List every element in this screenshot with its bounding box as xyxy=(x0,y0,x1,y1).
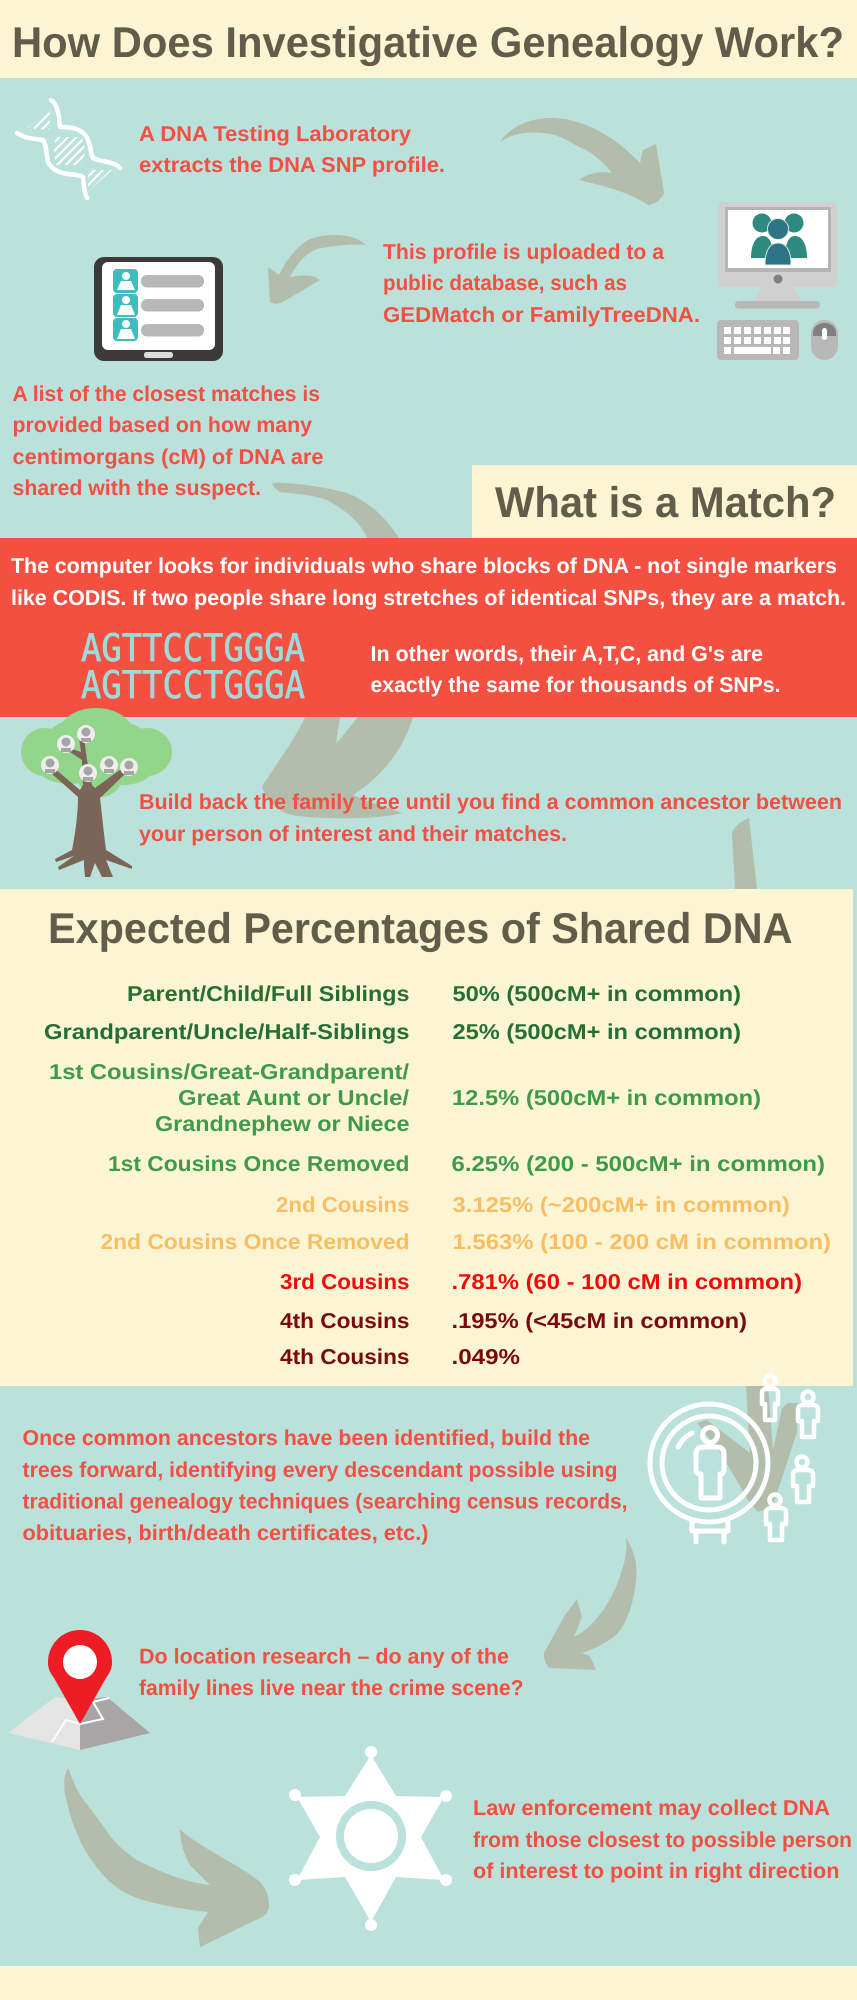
step 1 text: A DNA Testing Laboratory xyxy=(139,122,411,146)
match description text: like CODIS. If two people share long stretches of identical SNPs, they are a match. xyxy=(11,586,846,610)
what is a match heading box xyxy=(472,465,857,538)
panel: expected percentages xyxy=(0,889,853,1386)
row: third cousins: .781% (60 - 100 cM in common) xyxy=(452,1270,802,1294)
step 1 text: extracts the DNA SNP profile. xyxy=(139,153,445,177)
step 3 text xyxy=(12,382,324,500)
row: fourth cousins: .195% (<45cM in common) xyxy=(452,1309,747,1333)
step 1 text xyxy=(139,122,445,177)
match description text xyxy=(11,554,846,610)
row: second cousins: 3.125% (~200cM+ in common) xyxy=(452,1193,790,1217)
step 2 text: public database, such as xyxy=(383,271,627,295)
step 2 text xyxy=(383,240,700,327)
person 3 xyxy=(793,1456,813,1502)
row: grandparent: 25% (500cM+ in common) xyxy=(452,1020,741,1044)
icon: tablet with match list xyxy=(94,257,223,361)
person 4 xyxy=(766,1494,786,1540)
heading: What is a Match? xyxy=(495,479,836,527)
row: first cousins: 1st Cousins/Great-Grandparent/ xyxy=(49,1060,409,1084)
panel heading: Expected Percentages of Shared DNA xyxy=(48,905,792,953)
row: third cousins xyxy=(280,1270,802,1294)
row: second cousins once removed: 1.563% (100 - 200 cM in common) xyxy=(452,1230,831,1254)
person 2 xyxy=(798,1392,818,1437)
row: fourth cousins second: .049% xyxy=(452,1345,520,1369)
step 6 text: Do location research – do any of the xyxy=(139,1644,509,1668)
arrow: step 3 to family tree xyxy=(262,483,413,818)
icon: magnifier with people xyxy=(650,1376,818,1542)
arrow: step 2 to step 3 xyxy=(268,235,366,304)
step 4 text: Build back the family tree until you find a common ancestor between xyxy=(139,790,842,814)
title: How Does Investigative Genealogy Work? xyxy=(12,19,844,67)
sequence explanation xyxy=(370,642,780,697)
step 5 text: obituaries, birth/death certificates, etc.) xyxy=(22,1521,428,1545)
step 7 text: Law enforcement may collect DNA xyxy=(473,1796,830,1820)
row: second cousins: 2nd Cousins xyxy=(276,1193,410,1217)
arrow: step 1 to step 2 xyxy=(500,118,664,205)
sequence explanation: exactly the same for thousands of SNPs. xyxy=(370,673,780,697)
step 2 text: GEDMatch or FamilyTreeDNA. xyxy=(383,303,700,327)
row: first cousins once removed xyxy=(108,1152,825,1176)
step 6 text: family lines live near the crime scene? xyxy=(139,1676,524,1700)
row: fourth cousins second: 4th Cousins xyxy=(280,1345,410,1369)
row: fourth cousins xyxy=(280,1309,747,1333)
row: grandparent: Grandparent/Uncle/Half-Siblings xyxy=(44,1020,410,1044)
central person xyxy=(696,1428,724,1498)
icon: desktop computer xyxy=(717,202,838,360)
keyboard xyxy=(717,320,799,360)
step 3 text: A list of the closest matches is xyxy=(12,382,320,406)
red explanation band xyxy=(0,538,857,717)
row: first cousins: 12.5% (500cM+ in common) xyxy=(452,1086,761,1110)
row: first cousins: Grandnephew or Niece xyxy=(155,1112,410,1136)
row: first cousins: Great Aunt or Uncle/ xyxy=(178,1086,409,1110)
row: parent child xyxy=(127,982,741,1006)
arrow: step 5 to location xyxy=(544,1538,637,1670)
row: first cousins once removed: 6.25% (200 - 500cM+ in common) xyxy=(452,1152,825,1176)
row: parent child: 50% (500cM+ in common) xyxy=(452,982,741,1006)
person 1 xyxy=(762,1376,778,1420)
step 5 text: Once common ancestors have been identified, build the xyxy=(22,1426,590,1450)
step 7 text xyxy=(473,1796,852,1883)
arrow: behind magnifier xyxy=(697,1386,798,1512)
icon: sheriff star badge xyxy=(289,1746,452,1931)
matching DNA sequences xyxy=(81,626,305,707)
row: grandparent xyxy=(44,1020,741,1044)
step 4 text xyxy=(139,790,842,846)
sequence explanation: In other words, their A,T,C, and G's are xyxy=(370,642,763,666)
row: second cousins xyxy=(276,1193,790,1217)
step 5 text: traditional genealogy techniques (searching census records, xyxy=(22,1490,628,1514)
icon: map pin xyxy=(8,1630,150,1750)
step 3 text: provided based on how many xyxy=(12,413,312,437)
people on screen xyxy=(751,214,807,265)
step 5 text: trees forward, identifying every descendant possible using xyxy=(22,1458,618,1482)
row: second cousins once removed: 2nd Cousins Once Removed xyxy=(100,1230,410,1254)
row: first cousins once removed: 1st Cousins Once Removed xyxy=(108,1152,410,1176)
step 2 text: This profile is uploaded to a xyxy=(383,240,665,264)
footer band xyxy=(0,1966,857,2000)
step 3 text: shared with the suspect. xyxy=(12,476,261,500)
row: parent child: Parent/Child/Full Siblings xyxy=(127,982,410,1006)
row: fourth cousins: 4th Cousins xyxy=(280,1309,410,1333)
step 3 text: centimorgans (cM) of DNA are xyxy=(12,445,324,469)
icon: family tree xyxy=(21,708,172,877)
arrow tail: tree to expected percentages xyxy=(732,818,757,889)
step 5 text xyxy=(22,1426,628,1545)
step 4 text: your person of interest and their matches. xyxy=(139,822,567,846)
step 7 text: of interest to point in right direction xyxy=(473,1859,840,1883)
arrow notch detail xyxy=(336,717,358,744)
matching DNA sequences: AGTTCCTGGGA xyxy=(81,626,305,670)
arrow: location to badge xyxy=(64,1768,269,1947)
match description text: The computer looks for individuals who share blocks of DNA - not single markers xyxy=(11,554,837,578)
header banner xyxy=(0,0,857,78)
row: fourth cousins second xyxy=(280,1345,520,1369)
row: first cousins xyxy=(49,1060,761,1136)
row: third cousins: 3rd Cousins xyxy=(280,1270,410,1294)
matching DNA sequences: AGTTCCTGGGA xyxy=(81,663,305,707)
step 7 text: from those closest to possible person xyxy=(473,1828,852,1852)
icon: DNA helix xyxy=(17,100,120,198)
mouse xyxy=(811,320,838,360)
row: second cousins once removed xyxy=(100,1230,831,1254)
step 6 text xyxy=(139,1644,524,1700)
